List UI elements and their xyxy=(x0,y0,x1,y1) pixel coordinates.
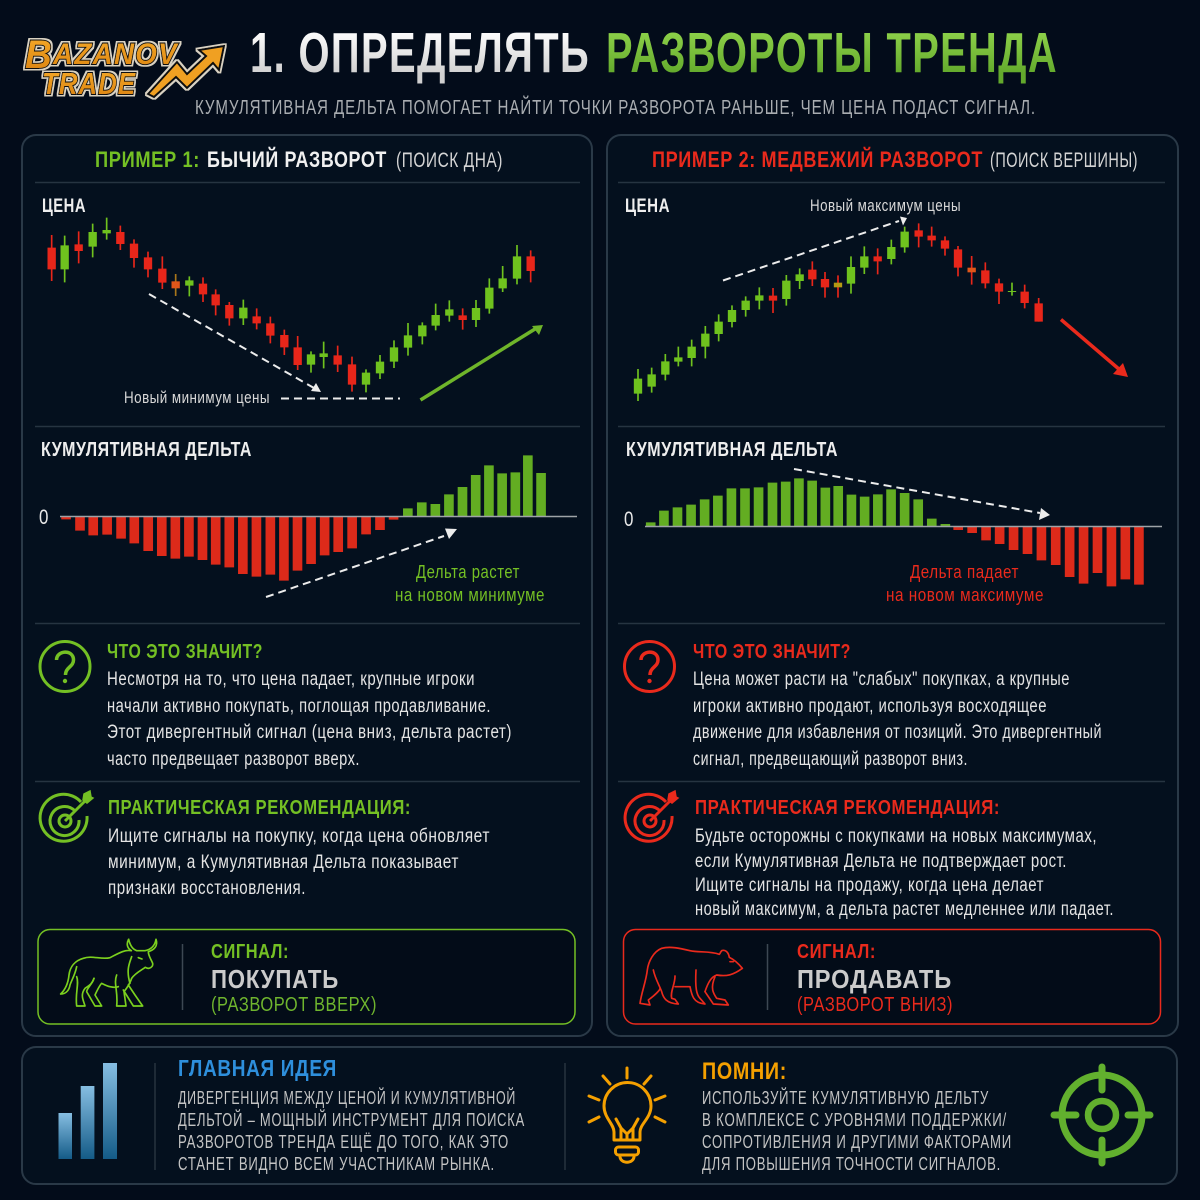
section: what it means xyxy=(107,641,512,770)
heading: example 2: ПРИМЕР 2: МЕДВЕЖИЙ РАЗВОРОТ xyxy=(652,147,983,172)
icon: target xyxy=(40,791,93,841)
text: signal sell: СИГНАЛ: xyxy=(797,941,876,963)
text: signal sell: (РАЗВОРОТ ВНИЗ) xyxy=(797,994,953,1016)
section: what it means xyxy=(693,641,1102,770)
section: practical recommendation xyxy=(108,797,490,899)
section: remember xyxy=(702,1058,1012,1174)
text: signal buy xyxy=(211,941,377,1016)
bar chart: cumulative delta rising xyxy=(60,455,577,581)
section: remember: ПОМНИ: xyxy=(702,1058,787,1085)
section: practical recommendation xyxy=(695,797,1114,920)
section: remember: ДЛЯ ПОВЫШЕНИЯ ТОЧНОСТИ СИГНАЛОВ. xyxy=(702,1154,1001,1174)
section: what it means: сигнал, предвещающий разворот вниз. xyxy=(693,749,968,770)
section: practical recommendation: Будьте осторожны с покупками на новых максимумах, xyxy=(695,826,1097,847)
annotation: delta rising: Дельта растет xyxy=(416,562,520,582)
section: remember: В КОМПЛЕКСЕ С УРОВНЯМИ ПОДДЕРЖКИ/ xyxy=(702,1110,1007,1130)
section: main idea xyxy=(178,1055,525,1174)
section: what it means: Этот дивергентный сигнал (цена вниз, дельта растет) xyxy=(107,722,512,743)
section: what it means: начали активно покупать, поглощая продавливание. xyxy=(107,696,491,717)
section: practical recommendation: минимум, а Кумулятивная Дельта показывает xyxy=(108,852,459,873)
heading: example 1: (ПОИСК ДНА) xyxy=(396,149,503,172)
arrow: dashed falling price trend xyxy=(149,294,321,392)
section: practical recommendation: ПРАКТИЧЕСКАЯ РЕКОМЕНДАЦИЯ: xyxy=(695,797,1000,819)
annotation: delta rising: на новом минимуме xyxy=(395,585,545,605)
annotation: delta falling: на новом максимуме xyxy=(886,585,1044,605)
label: cumulative delta: КУМУЛЯТИВНАЯ ДЕЛЬТА xyxy=(626,439,838,461)
title xyxy=(250,21,1058,85)
section: main idea: СТАНЕТ ВИДНО ВСЕМ УЧАСТНИКАМ РЫНКА. xyxy=(178,1154,495,1174)
section: practical recommendation: если Кумулятивная Дельта не подтверждает рост. xyxy=(695,851,1067,872)
section: what it means: часто предвещает разворот вверх. xyxy=(107,749,360,770)
section: what it means: ЧТО ЭТО ЗНАЧИТ? xyxy=(693,641,851,663)
section: what it means: игроки активно продают, используя восходящее xyxy=(693,696,1047,717)
section: main idea: РАЗВОРОТОВ ТРЕНДА ЕЩЁ ДО ТОГО, КАК ЭТО xyxy=(178,1132,509,1152)
annotation: delta falling xyxy=(886,562,1044,605)
arrow: red downward xyxy=(1061,320,1128,377)
annotation: delta rising xyxy=(395,562,545,605)
dashed level: new low xyxy=(281,398,400,400)
panel: example 2 bearish reversal xyxy=(607,135,1178,1036)
section: practical recommendation: Ищите сигналы на продажу, когда цена делает xyxy=(695,875,1044,896)
arrow: dashed rising price trend xyxy=(723,216,907,280)
section: remember: ИСПОЛЬЗУЙТЕ КУМУЛЯТИВНУЮ ДЕЛЬТУ xyxy=(702,1087,989,1108)
logo: Bazanov Trade: B xyxy=(25,33,55,77)
section: practical recommendation: ПРАКТИЧЕСКАЯ РЕКОМЕНДАЦИЯ: xyxy=(108,797,411,819)
label: zero: 0 xyxy=(624,508,634,531)
section: practical recommendation: признаки восстановления. xyxy=(108,878,306,899)
arrow: green upward xyxy=(420,325,543,400)
section: what it means: Несмотря на то, что цена падает, крупные игроки xyxy=(107,669,475,690)
arrow: dashed delta rising xyxy=(266,528,457,597)
label: new price low: Новый минимум цены xyxy=(124,388,270,407)
heading: example 1 xyxy=(95,147,503,172)
annotation: delta falling: Дельта падает xyxy=(910,562,1019,582)
label: price: ЦЕНА xyxy=(42,196,86,217)
text: signal buy: ПОКУПАТЬ xyxy=(211,964,339,994)
icon: question mark xyxy=(40,642,90,692)
section: main idea: ДЕЛЬТОЙ – МОЩНЫЙ ИНСТРУМЕНТ ДЛЯ ПОИСКА xyxy=(178,1109,525,1130)
section: main idea: ДИВЕРГЕНЦИЯ МЕЖДУ ЦЕНОЙ И КУМУЛЯТИВНОЙ xyxy=(178,1087,516,1108)
candlestick chart: price falling then reversing up xyxy=(52,218,531,392)
logo: Bazanov Trade: TRADE xyxy=(42,66,136,101)
label: cumulative delta: КУМУЛЯТИВНАЯ ДЕЛЬТА xyxy=(41,439,252,461)
signal box: buy xyxy=(38,930,575,1024)
section: what it means: ЧТО ЭТО ЗНАЧИТ? xyxy=(107,641,263,663)
text: signal buy: СИГНАЛ: xyxy=(211,941,289,963)
heading: example 1: БЫЧИЙ РАЗВОРОТ xyxy=(207,147,387,172)
icon: bull xyxy=(61,939,157,1006)
title: 1. ОПРЕДЕЛЯТЬ xyxy=(250,21,590,85)
heading: example 1: ПРИМЕР 1: xyxy=(95,147,200,172)
icon: question mark xyxy=(624,642,674,692)
heading: example 2: (ПОИСК ВЕРШИНЫ) xyxy=(990,149,1138,172)
bar chart: cumulative delta falling xyxy=(645,478,1162,586)
section: practical recommendation: Ищите сигналы на покупку, когда цена обновляет xyxy=(108,826,490,847)
label: zero: 0 xyxy=(39,506,49,529)
label: price: ЦЕНА xyxy=(625,196,670,217)
text: signal sell: ПРОДАВАТЬ xyxy=(797,964,952,994)
signal box: sell xyxy=(624,930,1160,1024)
arrow: dashed delta falling xyxy=(794,469,1050,520)
section: what it means: Цена может расти на "слабых" покупках, а крупные xyxy=(693,669,1070,690)
panel: example 1 bullish reversal xyxy=(22,135,592,1036)
text: signal buy: (РАЗВОРОТ ВВЕРХ) xyxy=(211,994,377,1016)
icon: crosshair xyxy=(1054,1067,1150,1163)
text: signal sell xyxy=(797,941,953,1016)
logo: Bazanov Trade: AZANOV xyxy=(52,38,179,71)
icon: rising bars xyxy=(58,1063,117,1159)
label: new price high: Новый максимум цены xyxy=(810,196,961,215)
section: remember: СОПРОТИВЛЕНИЯ И ДРУГИМИ ФАКТОРАМИ xyxy=(702,1132,1012,1152)
panel: bottom summary xyxy=(22,1047,1177,1184)
logo: Bazanov Trade xyxy=(25,33,224,101)
section: main idea: ГЛАВНАЯ ИДЕЯ xyxy=(178,1055,337,1081)
icon: target xyxy=(625,791,678,841)
icon: bear xyxy=(640,947,742,1005)
icon: light bulb xyxy=(589,1068,665,1162)
candlestick chart: price rising then reversing down xyxy=(638,223,1039,401)
